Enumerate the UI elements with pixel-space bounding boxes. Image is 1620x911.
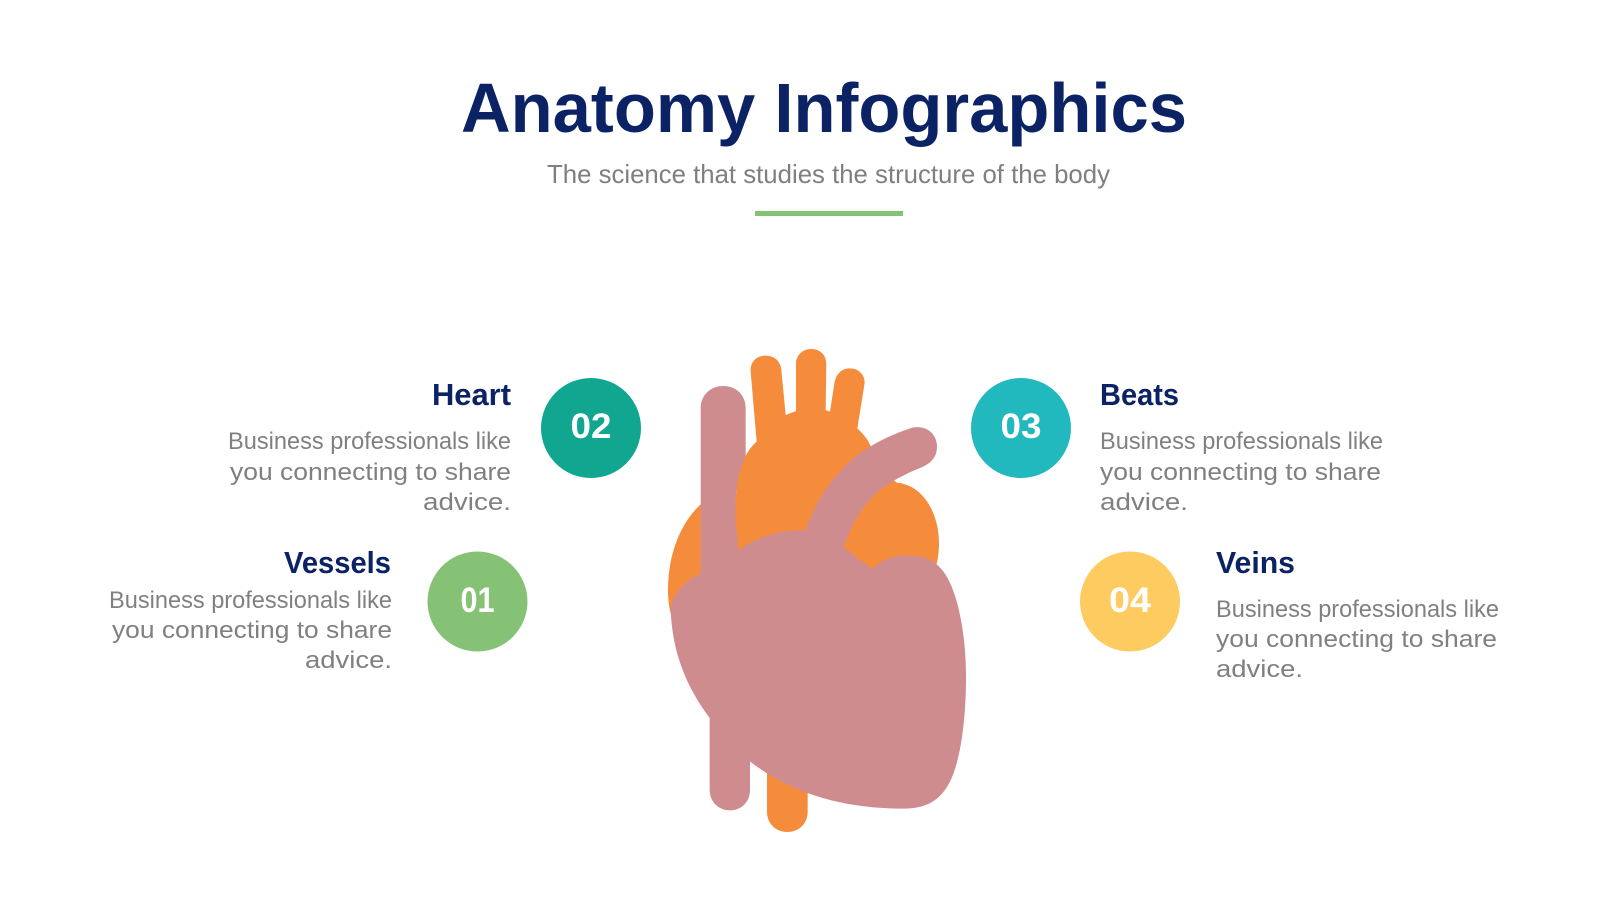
- item 03: Beats: [971, 377, 1383, 516]
- badge 03: 03: [1000, 407, 1042, 446]
- badge 02: [541, 378, 641, 478]
- badge 02: 02: [570, 407, 612, 446]
- description: Heart: Business professionals like: [228, 428, 511, 455]
- description: Veins: Business professionals like: [1216, 596, 1499, 623]
- badge 01: [428, 552, 528, 652]
- pink heart body and vessels: [671, 386, 966, 810]
- heart illustration: [668, 349, 966, 832]
- description: Veins: you connecting to share: [1216, 626, 1497, 653]
- badge 04: [1080, 552, 1180, 652]
- description: Heart: [228, 428, 511, 516]
- description: Vessels: advice.: [305, 647, 392, 674]
- badge 04: 04: [1109, 581, 1152, 620]
- heading: Beats: Beats: [1100, 377, 1179, 412]
- badge 01: 01: [460, 581, 494, 620]
- description: Vessels: [109, 587, 392, 674]
- description: Beats: [1100, 428, 1383, 516]
- subtitle: The science that studies the structure of the body: [547, 159, 1110, 189]
- description: Heart: advice.: [423, 489, 511, 516]
- description: Beats: advice.: [1100, 489, 1188, 516]
- title: Anatomy Infographics: [461, 69, 1187, 147]
- badge 03: [971, 378, 1071, 478]
- description: Vessels: you connecting to share: [112, 617, 392, 644]
- heading: Veins: Veins: [1216, 545, 1295, 580]
- heading: Heart: Heart: [432, 377, 511, 412]
- description: Beats: you connecting to share: [1100, 459, 1381, 486]
- description: Veins: [1216, 596, 1499, 683]
- description: Vessels: Business professionals like: [109, 587, 392, 614]
- title underline: [755, 211, 903, 216]
- orange vessels and atria: [668, 349, 939, 832]
- item 02: Heart: [228, 377, 641, 516]
- description: Veins: advice.: [1216, 656, 1303, 683]
- description: Heart: you connecting to share: [230, 459, 511, 486]
- description: Beats: Business professionals like: [1100, 428, 1383, 455]
- item 04: Veins: [1080, 545, 1499, 683]
- item 01: Vessels: [109, 545, 528, 674]
- heading: Vessels: Vessels: [284, 545, 391, 580]
